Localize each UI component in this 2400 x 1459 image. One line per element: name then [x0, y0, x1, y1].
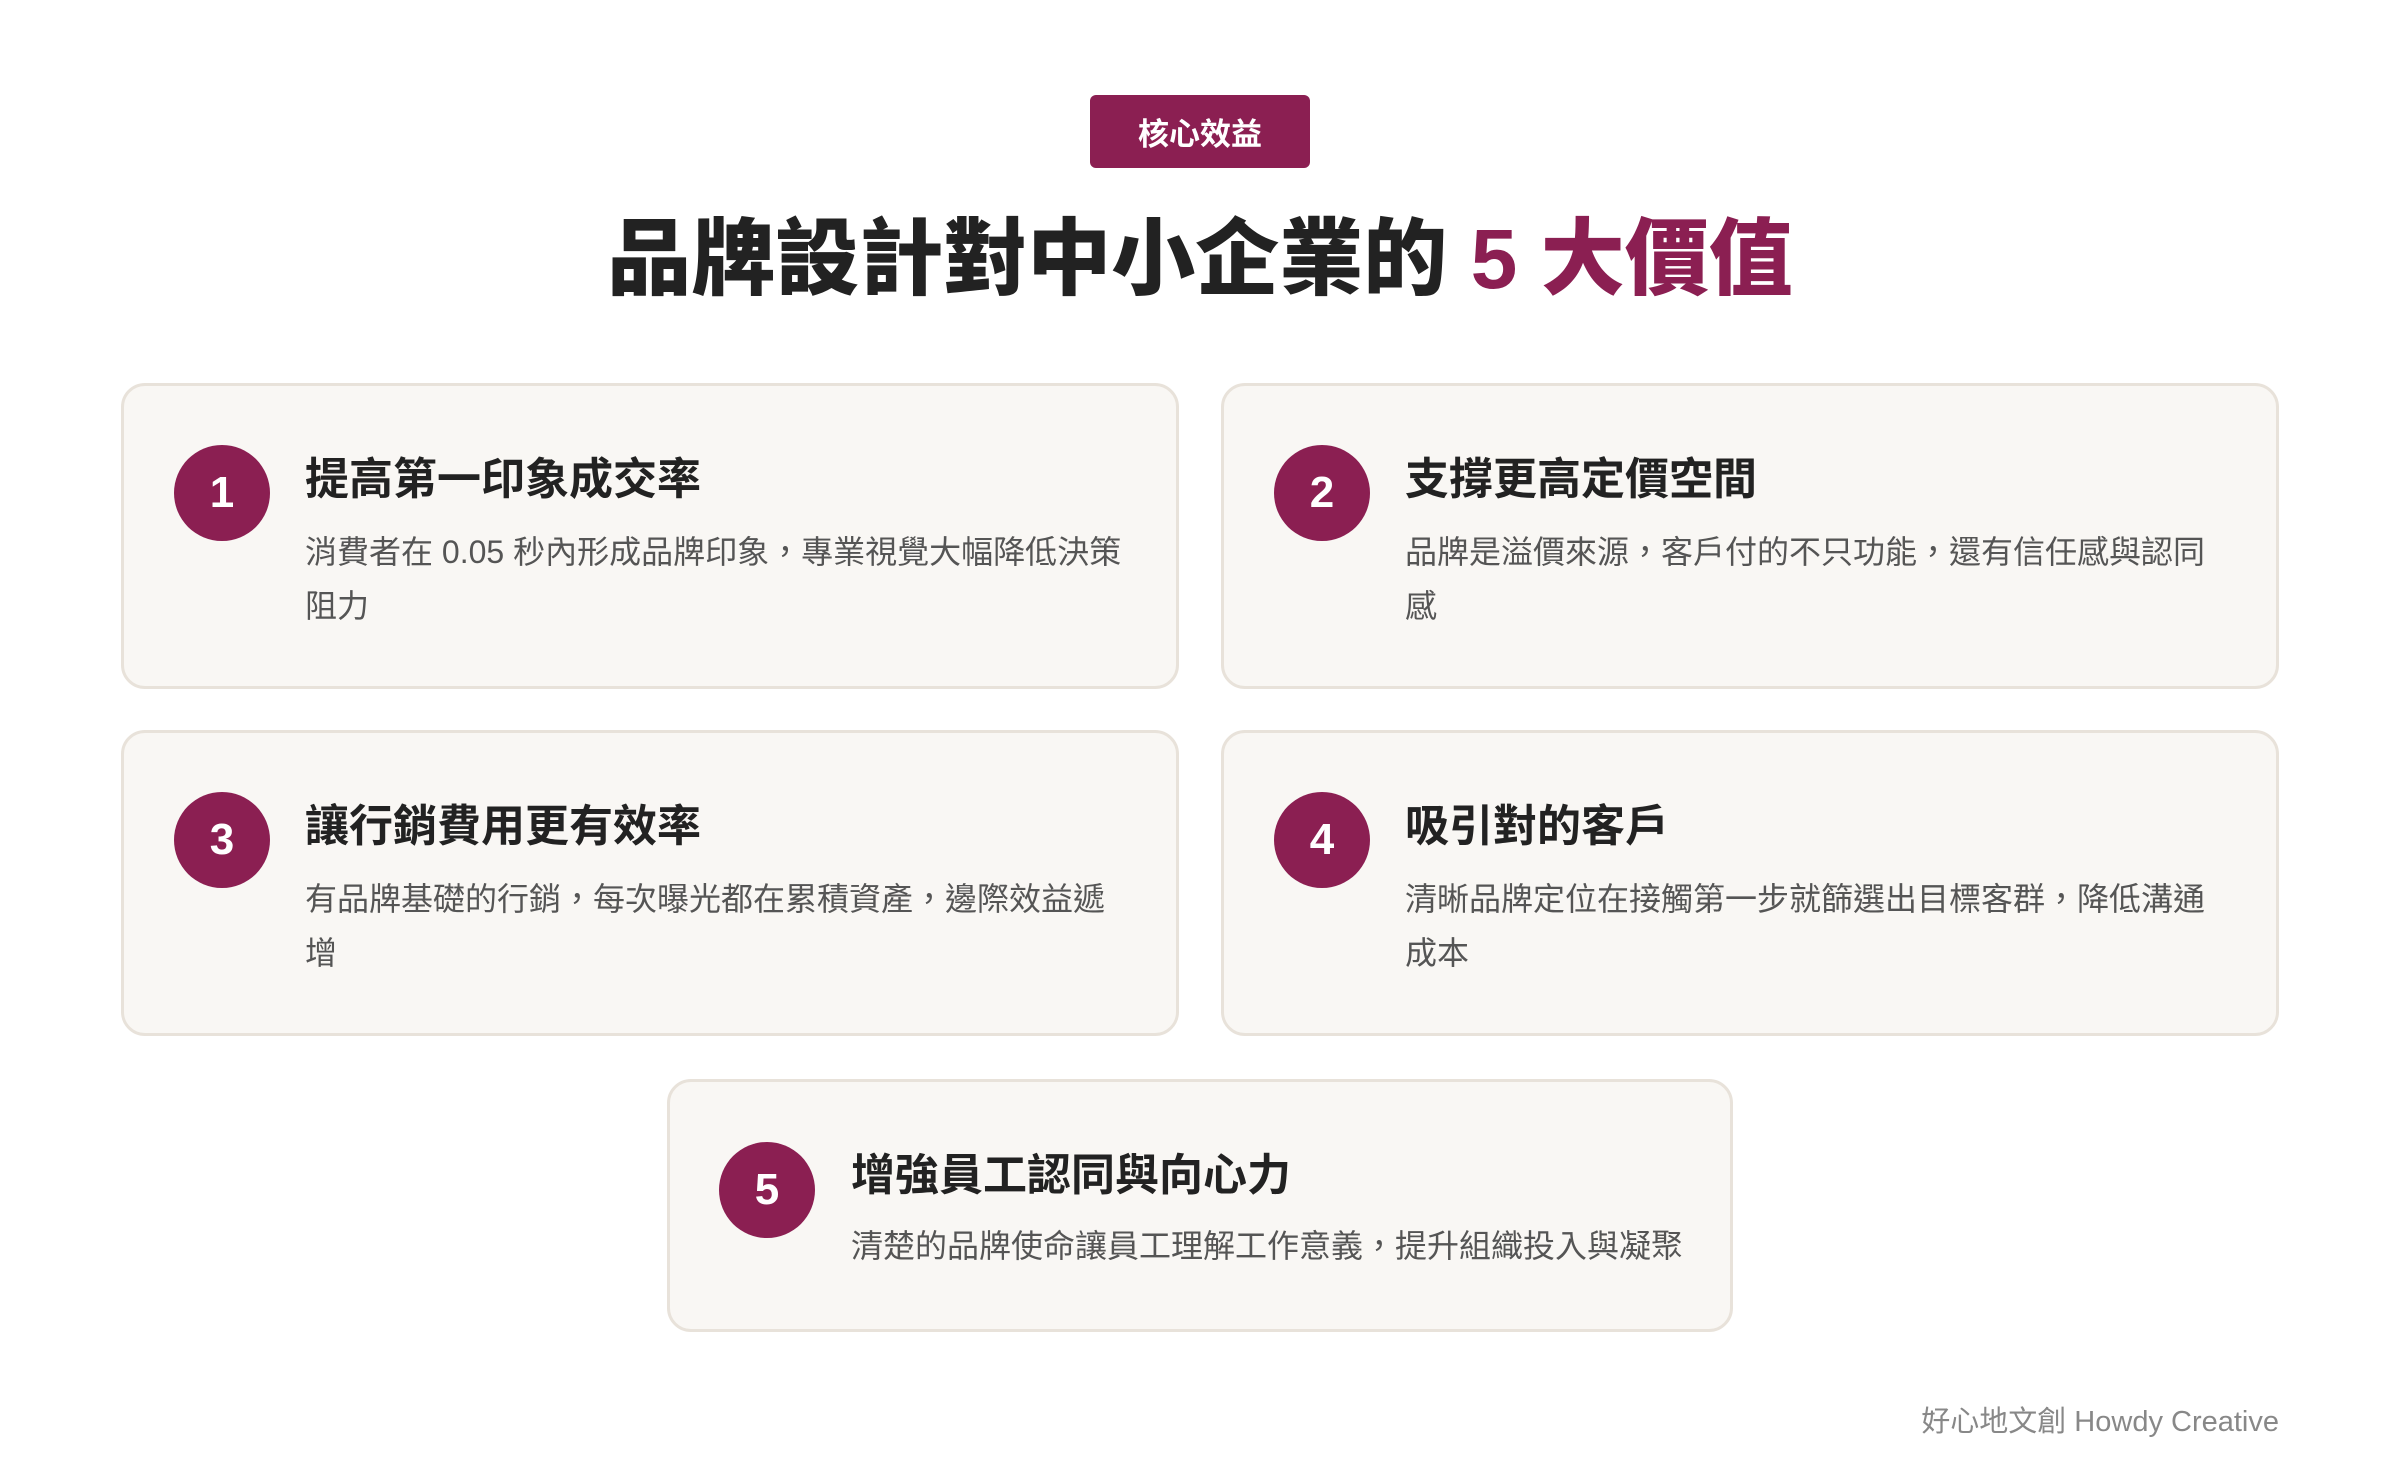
heading 2: 支撐更高定價空間 — [1405, 455, 1757, 504]
icon: number 5 — [719, 1142, 815, 1238]
icon: number 2 — [1274, 445, 1370, 541]
panel: card 2 — [1221, 383, 2279, 689]
text 1: 阻力 — [305, 588, 369, 624]
text 2: 感 — [1405, 588, 1437, 624]
badge: 核心效益 — [1138, 117, 1262, 152]
text 2: 品牌是溢價來源，客戶付的不只功能，還有信任感與認同 — [1405, 534, 2205, 570]
icon: number 2: 2 — [1310, 468, 1334, 517]
icon: number 3 — [174, 792, 270, 888]
icon: number 3: 3 — [210, 815, 234, 864]
panel: card 4 — [1221, 730, 2279, 1036]
title: 品牌設計對中小企業的 5 大價值 — [607, 212, 1793, 306]
text 4: 成本 — [1405, 935, 1469, 971]
text 5: 清楚的品牌使命讓員工理解工作意義，提升組織投入與凝聚 — [851, 1228, 1683, 1264]
heading 5: 增強員工認同與向心力 — [851, 1151, 1291, 1200]
badge — [1090, 95, 1310, 168]
icon: number 4 — [1274, 792, 1370, 888]
text 3: 增 — [305, 935, 337, 971]
text 1: 消費者在 0.05 秒內形成品牌印象，專業視覺大幅降低決策 — [305, 534, 1121, 570]
text 3 — [305, 881, 1105, 971]
icon: number 5: 5 — [755, 1165, 779, 1214]
heading 3: 讓行銷費用更有效率 — [305, 802, 701, 851]
text 2 — [1405, 534, 2205, 624]
icon: number 1: 1 — [210, 468, 234, 517]
text 4 — [1405, 881, 2205, 971]
text 3: 有品牌基礎的行銷，每次曝光都在累積資產，邊際效益遞 — [305, 881, 1105, 917]
icon: number 1 — [174, 445, 270, 541]
heading 4: 吸引對的客戶 — [1405, 802, 1669, 851]
text 1 — [305, 534, 1121, 624]
text 4: 清晰品牌定位在接觸第一步就篩選出目標客群，降低溝通 — [1405, 881, 2205, 917]
heading 1: 提高第一印象成交率 — [305, 455, 701, 504]
footer credit: 好心地文創 Howdy Creative — [1921, 1406, 2279, 1438]
icon: number 4: 4 — [1310, 815, 1334, 864]
panel: card 3 — [121, 730, 1179, 1036]
panel: card 5 — [667, 1079, 1733, 1332]
panel: card 1 — [121, 383, 1179, 689]
